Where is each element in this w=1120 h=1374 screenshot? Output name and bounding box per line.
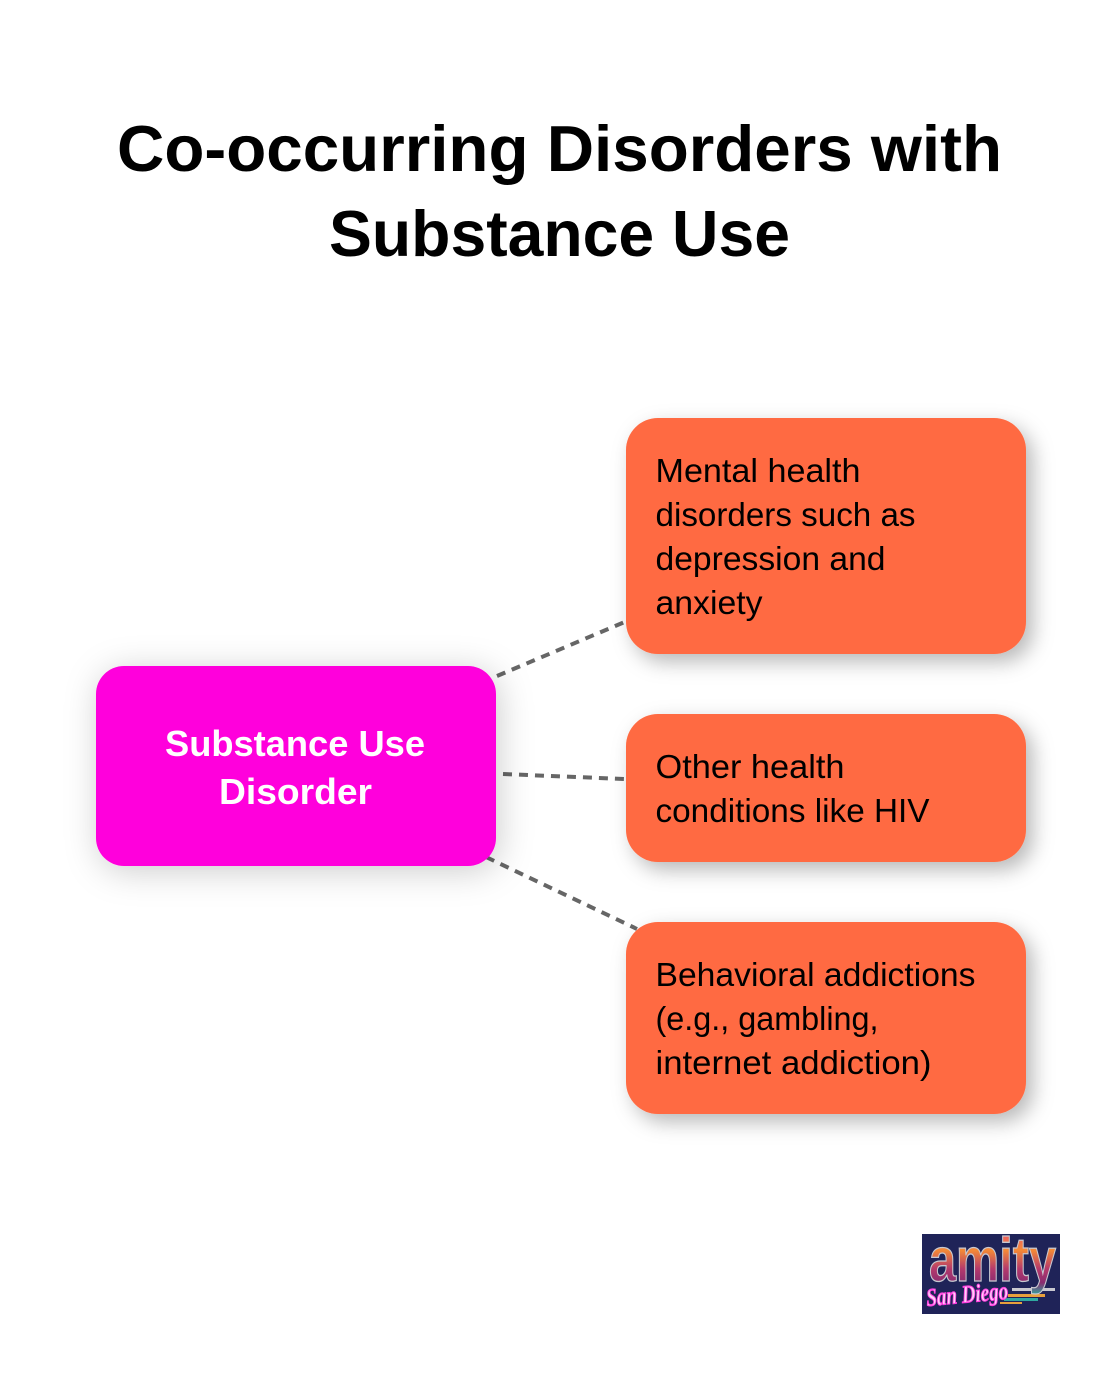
- panel: behavioral addictions: [626, 922, 1026, 1114]
- panel: mental health disorders: depression and: [656, 540, 886, 577]
- icon: amity san diego logo: amity: [929, 1226, 1056, 1295]
- title: [117, 112, 1002, 270]
- panel: substance use disorder: Substance Use: [165, 723, 425, 764]
- panel: behavioral addictions: Behavioral addictions: [656, 956, 976, 993]
- title: Co-occurring Disorders with: [117, 112, 1002, 185]
- connector: substance use disorder to mental health disorders: [497, 621, 627, 676]
- title: Substance Use: [329, 197, 790, 270]
- panel: behavioral addictions: internet addiction): [656, 1044, 932, 1081]
- icon: amity san diego logo: San Diego: [925, 1278, 1009, 1312]
- panel: mental health disorders: anxiety: [656, 584, 763, 621]
- panel: behavioral addictions: (e.g., gambling,: [656, 1000, 878, 1037]
- panel: mental health disorders: disorders such as: [656, 496, 916, 533]
- panel: other health conditions: conditions like HIV: [656, 792, 930, 829]
- panel: mental health disorders: Mental health: [656, 452, 860, 489]
- connector: substance use disorder to behavioral addictions: [486, 857, 637, 929]
- panel: other health conditions: Other health: [656, 748, 844, 785]
- panel: mental health disorders: [626, 418, 1026, 654]
- icon: amity san diego logo: [922, 1226, 1060, 1314]
- panel: substance use disorder: [96, 666, 496, 866]
- panel: substance use disorder: Disorder: [219, 771, 372, 812]
- panel: other health conditions: [626, 714, 1026, 862]
- connector: substance use disorder to other health conditions: [503, 774, 624, 779]
